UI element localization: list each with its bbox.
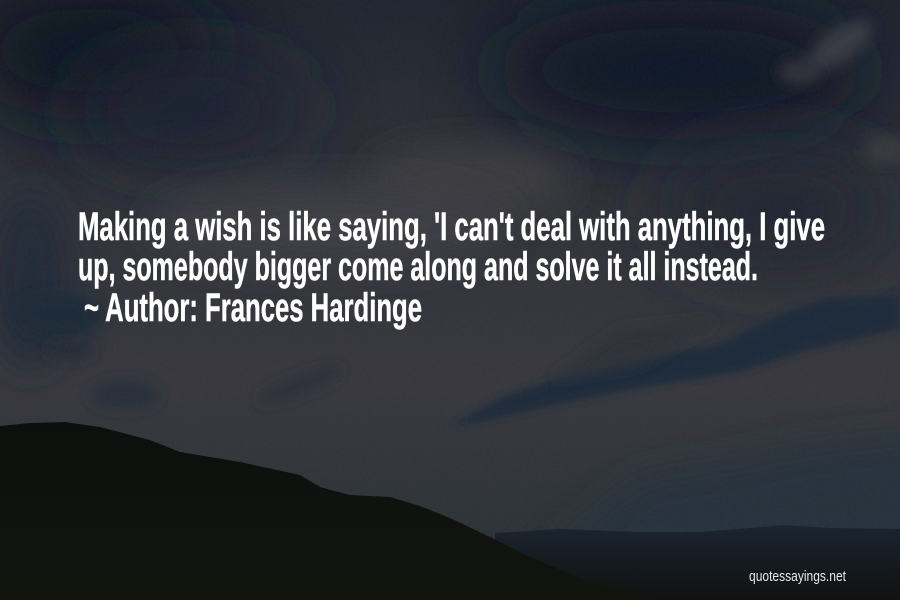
foreground hill bbox=[0, 422, 660, 600]
author attribution: ~ Author: Frances Hardinge bbox=[84, 286, 422, 330]
cloud bands bbox=[15, 293, 900, 560]
watermark: quotessayings.net bbox=[749, 568, 847, 585]
distant mountains bbox=[495, 525, 900, 600]
quote text bbox=[78, 205, 825, 289]
